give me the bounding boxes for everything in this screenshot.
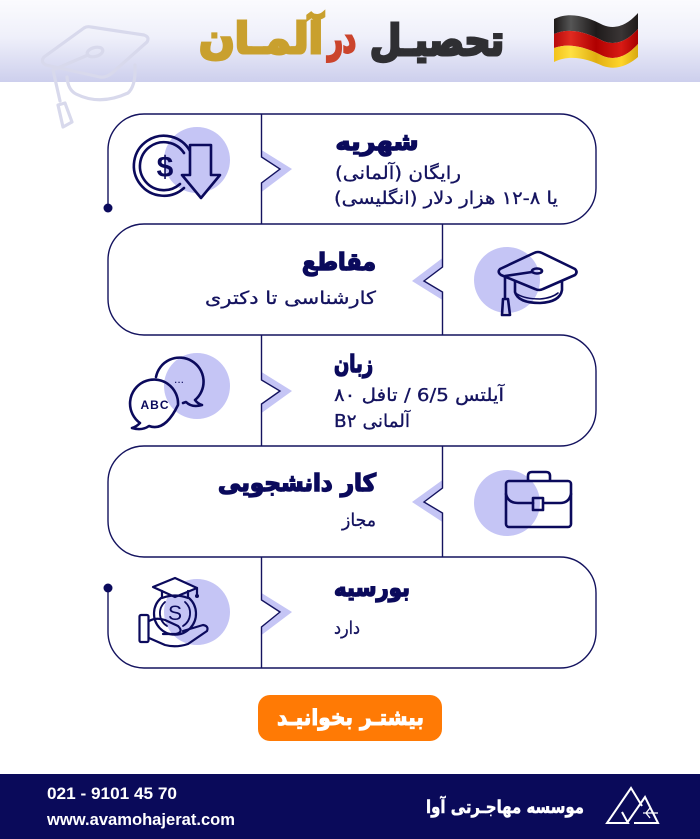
icon: speech bubbles: ... (174, 372, 184, 386)
heading: زبان (334, 350, 373, 378)
body text: دارد (334, 618, 360, 639)
heading: شهریه (336, 128, 418, 156)
button: read more (258, 695, 442, 741)
icon: watermark graduation cap (42, 27, 148, 127)
icon: speech bubbles: ABC (140, 398, 170, 412)
panel: connecting serpentine outline (108, 114, 596, 668)
icon: dollar coin with down arrow (134, 127, 230, 198)
panel: scholarship (140, 557, 410, 668)
phone number: 021 - 9101 45 70 (47, 784, 177, 803)
panel: language (130, 335, 505, 446)
divider with chevron (412, 446, 442, 557)
button: read more: بیشتـر بخوانیـد (277, 706, 424, 731)
divider with chevron (412, 224, 442, 335)
panel: student work (218, 446, 571, 557)
divider with chevron (262, 114, 292, 224)
title word: dar: در (327, 17, 356, 61)
icon: graduation cap (474, 247, 576, 315)
icon: speech bubbles (130, 353, 230, 429)
logo (607, 788, 658, 823)
header band (0, 0, 700, 82)
heading: بورسیه (334, 574, 410, 602)
body text line 2: یا ۸-۱۲ هزار دلار (انگلیسی) (334, 187, 558, 209)
footer (0, 774, 700, 839)
title word: alman: آلمـان (199, 13, 325, 63)
icon: dollar coin with down arrow: $ (157, 151, 174, 184)
body text: کارشناسی تا دکتری (205, 288, 376, 309)
start dot (104, 204, 112, 212)
divider with chevron (262, 335, 292, 446)
body text: مجاز (341, 510, 376, 531)
body text line 2: آلمانی B۲ (334, 409, 411, 432)
end dot (104, 584, 112, 592)
company name: موسسه مهاجـرتی آوا (426, 795, 584, 818)
body text: آیلتس 6/5 / تافل ۸۰ (334, 383, 505, 406)
title (199, 13, 504, 65)
panel: tuition (134, 114, 558, 224)
website: www.avamohajerat.com (46, 810, 235, 829)
icon: briefcase (474, 470, 571, 536)
body text: رایگان (آلمانی) (335, 161, 461, 184)
icon: hand holding coin with cap: S (168, 602, 182, 625)
heading: کار دانشجویی (218, 469, 376, 497)
icon: hand holding coin with cap (140, 578, 230, 646)
title word: tahsil: تحصیـل (370, 16, 504, 65)
heading: مقاطع (302, 248, 376, 276)
panel: degrees (205, 224, 576, 335)
divider with chevron (262, 557, 292, 668)
icon: german flag (554, 13, 638, 68)
